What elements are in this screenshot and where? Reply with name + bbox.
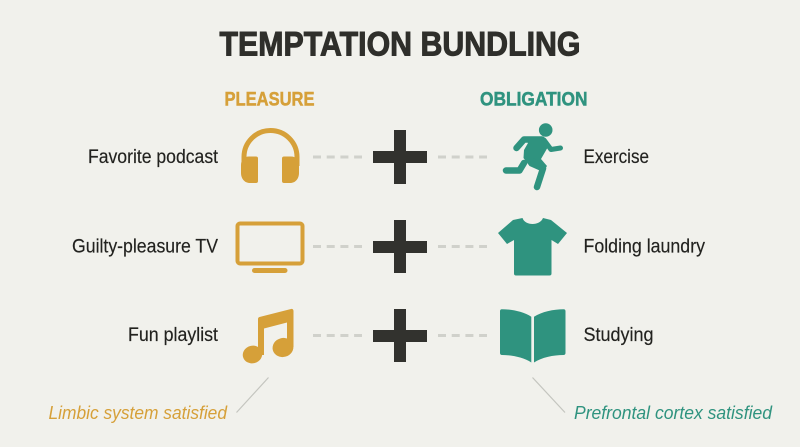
label: fun playlist: Fun playlist: [128, 325, 219, 346]
dashes: row 2 left: [313, 245, 362, 248]
plus: row 3: [373, 309, 427, 362]
icon: runner: [506, 123, 560, 187]
icon: television: [238, 224, 302, 273]
icon: t-shirt: [498, 218, 567, 276]
connector: prefrontal: [532, 378, 565, 412]
icon: headphones: [241, 131, 299, 183]
label: exercise: Exercise: [584, 147, 649, 168]
dashes: row 1 right: [438, 156, 487, 158]
connector: limbic: [236, 378, 268, 412]
label: studying: Studying: [584, 325, 654, 346]
dashes: row 2 right: [438, 245, 487, 248]
heading: obligation: OBLIGATION: [480, 88, 588, 110]
icon: music note: [241, 309, 296, 366]
dashes: row 3 left: [313, 334, 362, 337]
caption: limbic system satisfied: Limbic system satisfied: [48, 402, 228, 423]
label: favorite podcast: Favorite podcast: [88, 147, 219, 168]
icon: open book: [500, 309, 566, 362]
plus: row 1: [373, 130, 427, 184]
heading: pleasure: PLEASURE: [224, 88, 314, 110]
title: TEMPTATION BUNDLING: [220, 26, 580, 64]
dashes: row 1 left: [313, 156, 362, 158]
caption: prefrontal cortex satisfied: Prefrontal cortex satisfied: [574, 402, 773, 423]
dashes: row 3 right: [438, 334, 487, 337]
plus: row 2: [373, 220, 427, 273]
label: folding laundry: Folding laundry: [584, 236, 705, 258]
label: guilty-pleasure tv: Guilty-pleasure TV: [72, 236, 218, 258]
